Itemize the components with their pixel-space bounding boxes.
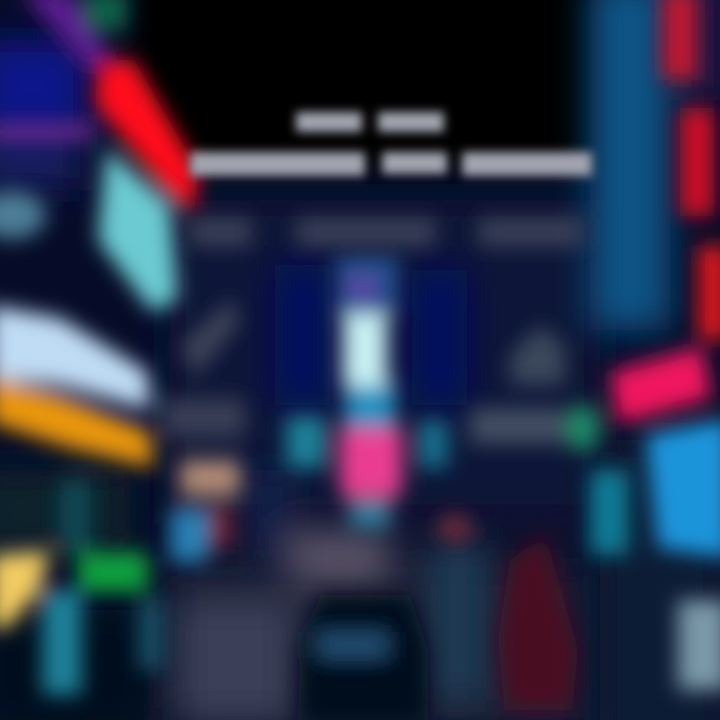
blue lower light (170, 508, 208, 562)
blue sign (646, 418, 720, 558)
left accents (20, 0, 108, 70)
cyan sign (98, 148, 178, 312)
mid street haze (170, 200, 600, 720)
orange band (0, 376, 154, 468)
teal column right (590, 470, 628, 555)
red neon strips (662, 0, 698, 80)
teal columns (42, 590, 82, 695)
head of person in blue (437, 514, 473, 542)
green sign (78, 552, 148, 592)
pale storefront (678, 600, 720, 690)
yellow light (0, 550, 50, 630)
neon red streak (94, 60, 198, 214)
pink sign (610, 346, 712, 424)
person in red (498, 535, 578, 710)
subtitle columns (190, 218, 584, 246)
tower top (336, 255, 398, 315)
cyan screens (286, 416, 326, 468)
car (298, 595, 428, 720)
tower white (343, 314, 387, 386)
right text block (510, 325, 565, 385)
pink screen (340, 428, 402, 496)
title (190, 112, 592, 176)
peach light (180, 460, 240, 496)
white band (0, 305, 150, 410)
green accent (566, 404, 600, 452)
dark sky (130, 0, 595, 175)
left text block (180, 298, 240, 378)
